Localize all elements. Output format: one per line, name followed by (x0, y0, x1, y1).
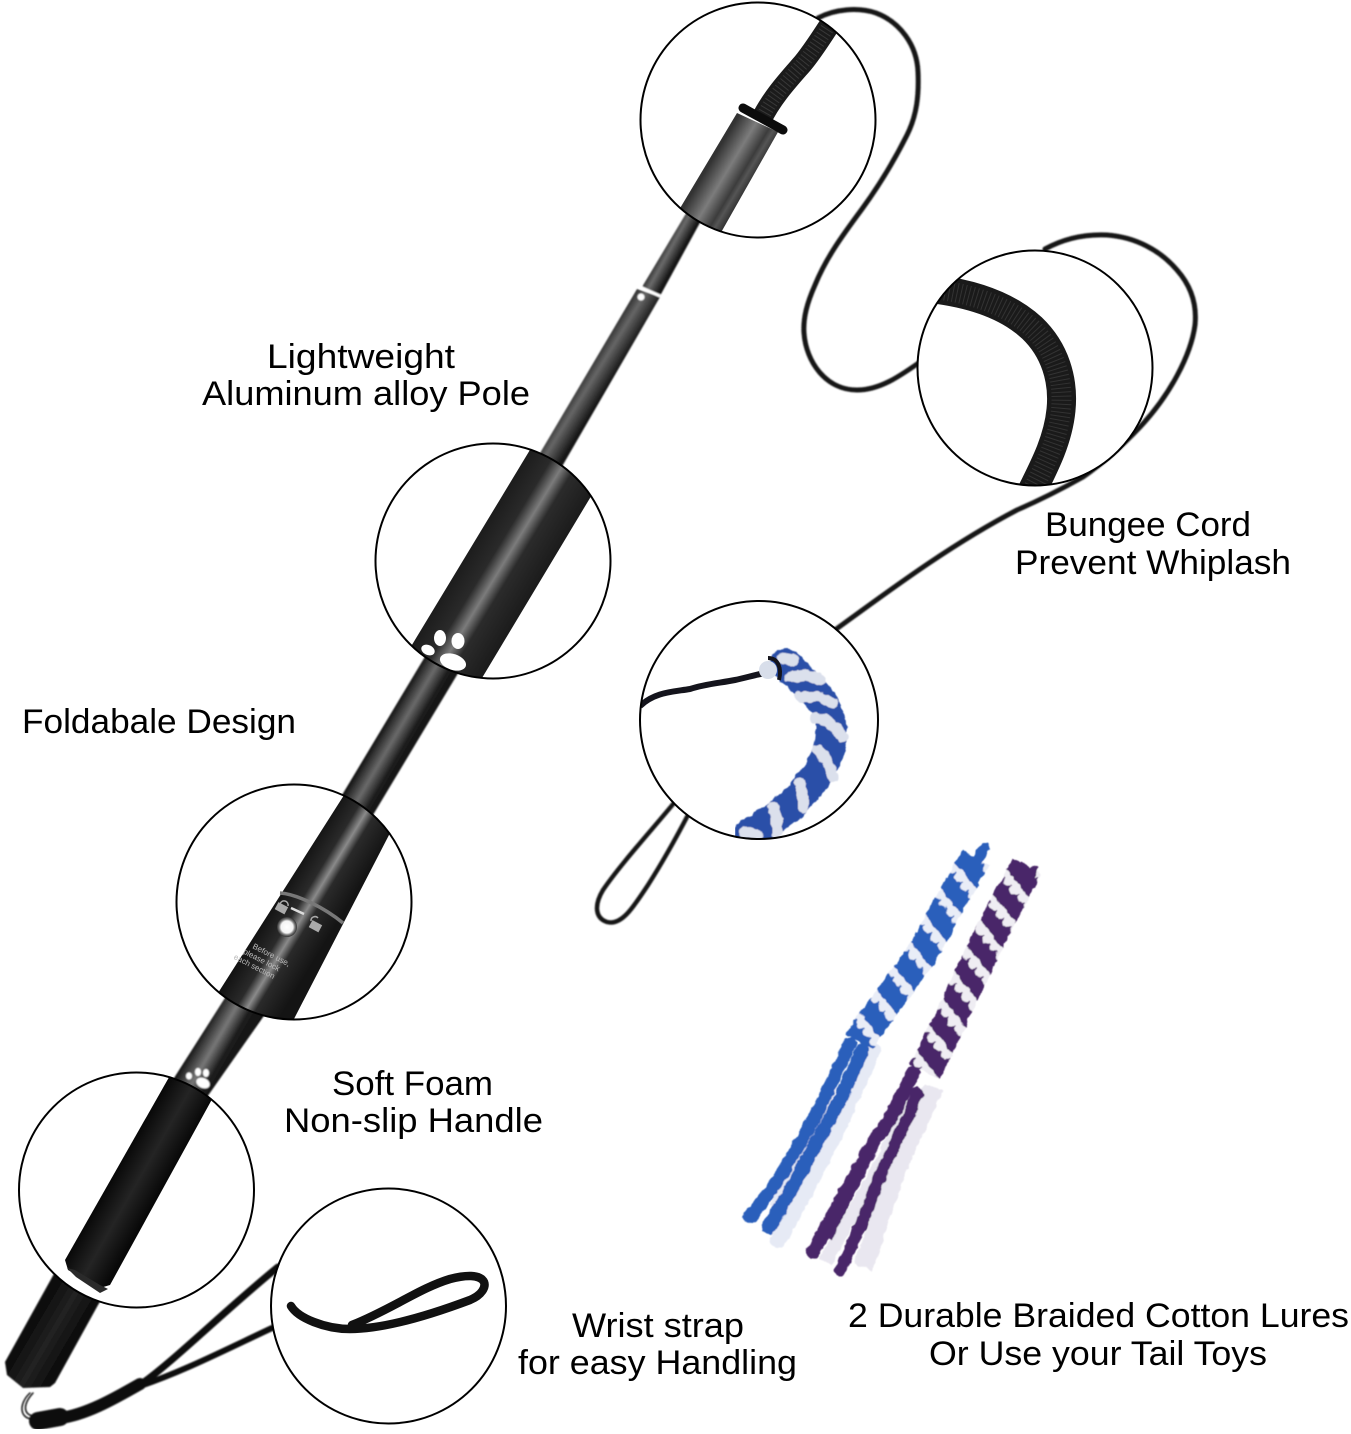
thick bungee cord close-up (925, 288, 1062, 495)
detail circle: aluminum pole sleeve (376, 430, 610, 693)
metal tube end (680, 113, 778, 231)
purple lure tassel strands (813, 1073, 913, 1253)
label: cotton lures (848, 1297, 1349, 1373)
purple lure tip (1016, 862, 1038, 885)
handle end cap (67, 1268, 108, 1293)
elastic bungee cord (597, 10, 1195, 923)
blue lure inner white strand (773, 1087, 833, 1207)
paw print on sleeve (421, 630, 466, 671)
closed lock icon (275, 901, 288, 914)
small paw print on pole (186, 1068, 211, 1090)
blue braided cotton lure (750, 848, 985, 1240)
blue braid (745, 664, 831, 838)
purple lure inner white strand (825, 1103, 910, 1262)
printed instructions: each section (232, 952, 276, 981)
lower grip (5, 1245, 118, 1388)
printed instructions: please lock (242, 947, 282, 974)
label: wrist strap (518, 1307, 797, 1382)
printed instructions: Before use, (251, 942, 292, 968)
braided cord close-up (761, 18, 834, 120)
label: soft foam handle: Soft Foam (332, 1065, 493, 1103)
label: soft foam handle: Non-slip Handle (284, 1102, 543, 1140)
open lock icon (309, 917, 322, 932)
purple lure white tassel (863, 1087, 933, 1267)
cord weave texture (925, 288, 1062, 495)
purple lure braid (925, 866, 1027, 1072)
label: wrist strap: for easy Handling (518, 1344, 797, 1382)
fourth pole section (160, 990, 282, 1100)
upper thin pole section (642, 190, 714, 296)
detail circle: bungee cord texture (918, 250, 1152, 495)
label: cotton lures: Or Use your Tail Toys (929, 1335, 1267, 1373)
label: lightweight pole: Aluminum alloy Pole (202, 375, 530, 413)
blue lure tassel strands (750, 1043, 850, 1217)
black thread (640, 672, 770, 706)
detail circle: wrist strap (271, 1188, 506, 1424)
label: foldable design: Foldabale Design (22, 703, 296, 741)
detail circle: bungee attachment (640, 2, 876, 259)
purple braided cotton lure (813, 862, 1038, 1270)
label: bungee cord: Prevent Whiplash (1015, 544, 1291, 582)
lock button (277, 917, 297, 937)
detail circle: foldable lock joint (176, 770, 412, 1046)
pole joint ring (640, 287, 660, 296)
blue lure white tassel (778, 1050, 872, 1240)
printed instructions (234, 943, 288, 979)
pole sleeve (412, 450, 590, 677)
label: cotton lures: 2 Durable Braided Cotton Lures (848, 1297, 1349, 1335)
wrist strap close-up (291, 1276, 484, 1329)
wrist strap loop (22, 1267, 278, 1421)
braid knot (759, 661, 777, 679)
label: soft foam handle (284, 1065, 543, 1140)
grip wire (64, 1277, 72, 1282)
pole dot (638, 294, 644, 300)
detail circle: cotton lure attachment (640, 601, 878, 839)
label: bungee cord: Bungee Cord (1045, 506, 1251, 544)
tube flange (743, 108, 783, 130)
label: lightweight pole: Lightweight (267, 338, 456, 376)
joint ring (280, 893, 343, 923)
foam handle (65, 1072, 216, 1288)
white braid rows (745, 658, 843, 835)
label: lightweight pole (202, 338, 530, 413)
second pole section (530, 289, 660, 470)
cord weave texture (761, 18, 834, 120)
third pole section (327, 630, 484, 820)
lock arrow (291, 908, 304, 914)
detail circle: foam handle (19, 1072, 254, 1308)
telescopic pole (5, 190, 714, 1388)
label: wrist strap: Wrist strap (572, 1307, 744, 1345)
label: bungee cord (1015, 506, 1291, 582)
blue lure tip (977, 848, 985, 860)
joint tube (219, 796, 390, 1018)
cotton braid (745, 658, 843, 838)
blue lure braid (860, 858, 976, 1042)
